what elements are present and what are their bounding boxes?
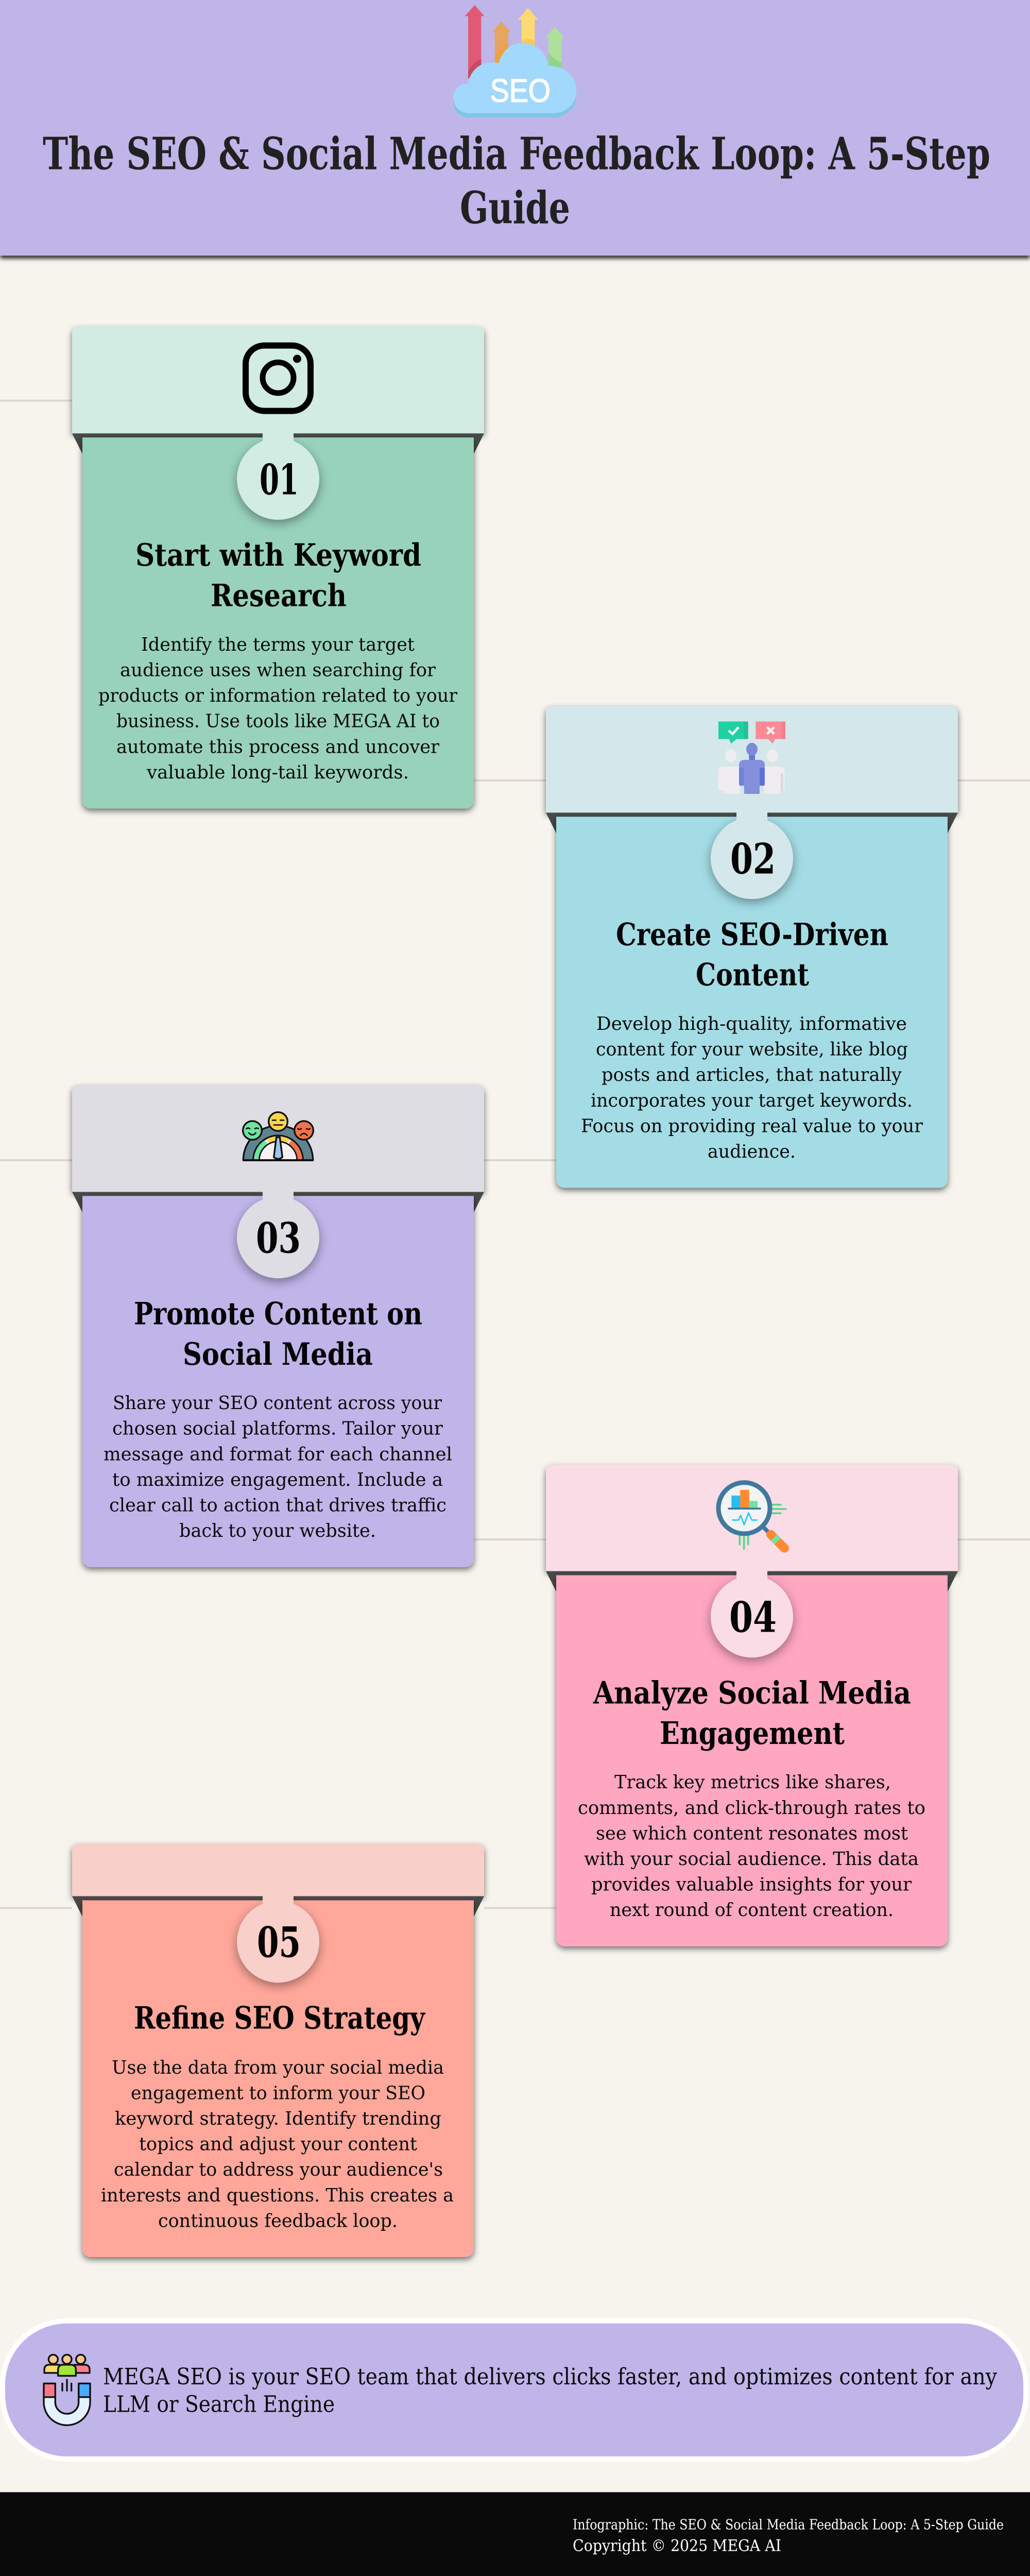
- card header 01: [72, 327, 484, 433]
- step number 01: [237, 432, 319, 520]
- step text 01: business. Use tools like MEGA AI to: [116, 711, 440, 732]
- panel: step 02: [546, 706, 958, 1188]
- card body 02: [556, 817, 948, 1188]
- step number 02: 02: [730, 835, 776, 884]
- step heading 03: Social Media: [183, 1336, 373, 1372]
- step text 01: automate this process and uncover: [116, 736, 440, 757]
- footer text: Copyright © 2025 MEGA AI: [573, 2537, 781, 2555]
- step text 05: [101, 2057, 454, 2231]
- step text 02: incorporates your target keywords.: [591, 1090, 913, 1111]
- step text 03: [104, 1393, 452, 1541]
- header band: [0, 0, 1030, 256]
- step text 02: content for your website, like blog: [596, 1039, 908, 1060]
- step text 02: posts and articles, that naturally: [602, 1064, 902, 1086]
- step heading 03: Promote Content on: [134, 1296, 422, 1332]
- step number 04: [711, 1570, 793, 1657]
- footer: [0, 2492, 1030, 2576]
- step heading 05: Refine SEO Strategy: [134, 2001, 426, 2036]
- step text 05: interests and questions. This creates a: [101, 2185, 454, 2206]
- step text 04: next round of content creation.: [610, 1900, 894, 1921]
- step number 01: 01: [260, 455, 299, 504]
- step text 02: [581, 1013, 923, 1162]
- step heading 04: Analyze Social Media: [593, 1675, 911, 1711]
- banner text: LLM or Search Engine: [103, 2392, 335, 2418]
- step text 05: calendar to address your audience's: [114, 2159, 443, 2180]
- card body 05: [82, 1900, 474, 2257]
- banner text: [103, 2364, 997, 2418]
- card header 02: [546, 706, 958, 812]
- icon: magnifier with chart: [718, 1483, 786, 1549]
- step text 04: with your social audience. This data: [584, 1849, 919, 1870]
- card header 05: [72, 1843, 484, 1896]
- icon: SEO cloud with arrows: [453, 5, 576, 117]
- card header 03: [72, 1085, 484, 1192]
- icon: people with feedback bubbles: [718, 721, 785, 794]
- step heading 03: [134, 1296, 422, 1372]
- card body 03: [82, 1196, 474, 1567]
- step text 03: chosen social platforms. Tailor your: [112, 1418, 443, 1439]
- step text 03: clear call to action that drives traffic: [109, 1495, 447, 1516]
- step number 05: 05: [257, 1918, 301, 1968]
- step heading 02: Content: [696, 957, 809, 993]
- step text 03: to maximize engagement. Include a: [112, 1469, 443, 1490]
- step text 02: Develop high-quality, informative: [596, 1013, 907, 1035]
- card body 01: [82, 437, 474, 808]
- step text 04: provides valuable insights for your: [591, 1874, 912, 1895]
- step text 01: audience uses when searching for: [120, 660, 436, 681]
- step text 01: [98, 634, 458, 783]
- step heading 02: Create SEO-Driven: [616, 917, 888, 953]
- step number 04: 04: [729, 1593, 777, 1642]
- title: Guide: [460, 182, 570, 234]
- icon: SEO cloud with arrows: SEO: [490, 73, 551, 109]
- step number 03: 03: [256, 1214, 301, 1263]
- step text 01: products or information related to your: [98, 685, 458, 706]
- step text 05: Use the data from your social media: [112, 2057, 444, 2078]
- icon: sentiment gauge: [243, 1112, 313, 1160]
- step text 04: see which content resonates most: [596, 1823, 908, 1844]
- connector lines: [0, 401, 1030, 1908]
- step text 05: keyword strategy. Identify trending: [115, 2108, 441, 2129]
- step text 02: audience.: [708, 1141, 796, 1162]
- step heading 01: Research: [211, 578, 347, 614]
- panel: step 04: [546, 1465, 958, 1946]
- step heading 04: [593, 1675, 911, 1752]
- step heading 04: Engagement: [660, 1716, 845, 1752]
- panel: step 01: [72, 327, 484, 808]
- step text 03: message and format for each channel: [104, 1444, 452, 1465]
- card header 04: [546, 1465, 958, 1571]
- step text 01: valuable long-tail keywords.: [146, 762, 409, 783]
- icon: instagram: [246, 346, 311, 411]
- step heading 02: [616, 917, 888, 993]
- step text 02: Focus on providing real value to your: [581, 1116, 923, 1137]
- icon: audience magnet: [44, 2354, 90, 2425]
- footer text: [573, 2517, 1004, 2555]
- step text 05: engagement to inform your SEO: [131, 2083, 425, 2104]
- step heading 01: Start with Keyword: [135, 537, 421, 573]
- step text 03: Share your SEO content across your: [113, 1393, 442, 1414]
- step text 04: Track key metrics like shares,: [614, 1772, 891, 1793]
- step text 05: topics and adjust your content: [139, 2134, 418, 2155]
- step number 03: [237, 1191, 319, 1278]
- card body 04: [556, 1575, 948, 1946]
- callout: MEGA SEO banner: [3, 2321, 1026, 2459]
- step number 05: [237, 1895, 319, 1982]
- step text 01: Identify the terms your target: [141, 634, 415, 655]
- panel: step 03: [72, 1085, 484, 1567]
- step number 02: [711, 811, 793, 899]
- step text 03: back to your website.: [179, 1520, 376, 1541]
- step text 05: continuous feedback loop.: [158, 2211, 398, 2231]
- panel: step 05: [72, 1843, 484, 2257]
- title: [43, 128, 990, 234]
- step text 04: comments, and click-through rates to: [578, 1798, 925, 1819]
- step heading 01: [135, 537, 421, 614]
- step text 04: [578, 1772, 925, 1921]
